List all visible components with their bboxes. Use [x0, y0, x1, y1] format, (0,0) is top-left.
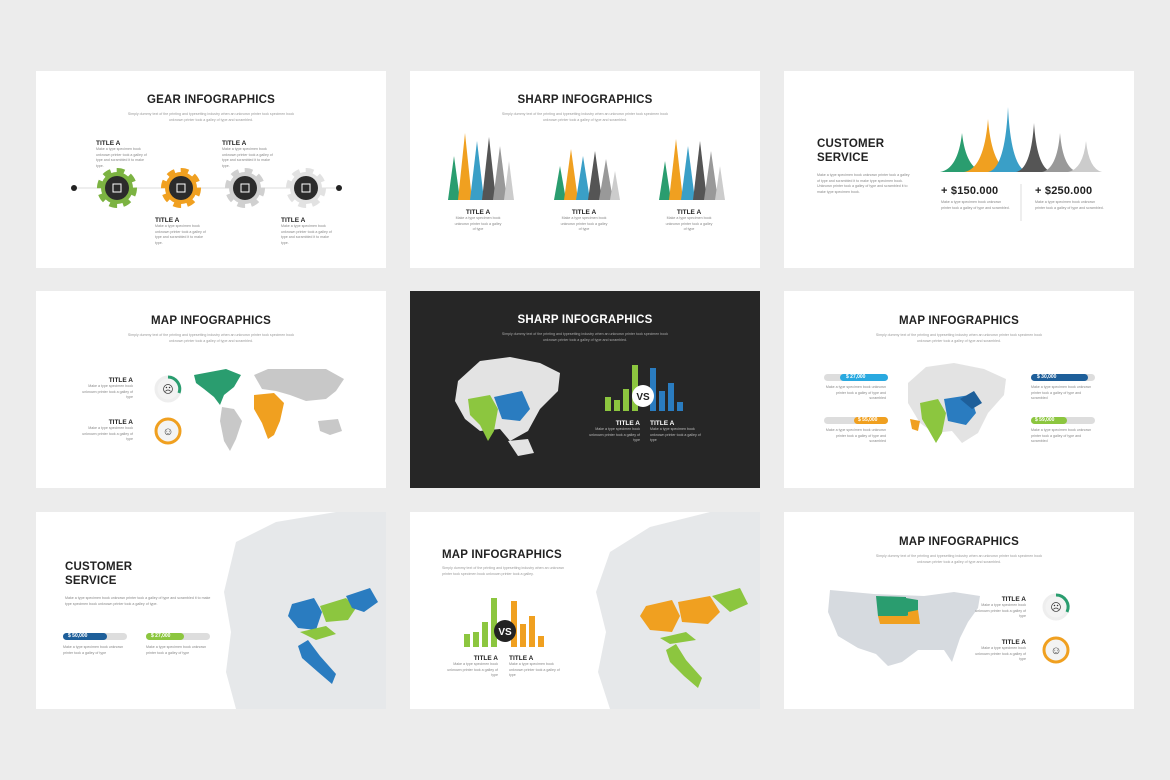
slide: map infographics asia pills: Make a type specimen book unknown printer took a galley of type and scrambled: [826, 428, 886, 443]
text: title A 4: TITLE A: [281, 217, 305, 224]
europe map: [224, 512, 386, 709]
bar chart vs: [464, 598, 544, 647]
pill: $27,000: $ 27,000: [151, 633, 170, 639]
text: title A right: [666, 209, 712, 231]
slide: map infographics usa: [784, 512, 1134, 709]
title: GEAR INFOGRAPHICS: [147, 94, 275, 106]
pill: $30,000: $ 30,000: [1037, 374, 1056, 380]
text: title A right: [650, 420, 701, 442]
heading: CUSTOMER: [65, 561, 132, 573]
text: title A 2: Make a type specimen book unknown printer took a galley of type: [975, 646, 1026, 661]
subtitle: Simply dummy text of the printing and typesetting industry when an unknown printer took specimen book unknown printer took a galley of type and scrambled.: [128, 112, 294, 122]
usa map and icons: [828, 590, 1070, 666]
europe map: [596, 512, 760, 709]
text: title A 1: [975, 596, 1026, 618]
text: title A 1: Make a type specimen book unknown printer took a galley of type and scrambled it to make type.: [96, 147, 147, 168]
title: MAP INFOGRAPHICS: [151, 315, 271, 327]
slide: map infographics asia pills: Make a type specimen book unknown printer took a galley of type and scrambled: [1031, 385, 1091, 400]
text: title A left: TITLE A: [474, 655, 498, 662]
heading: SERVICE: [817, 152, 869, 164]
slide: customer service europe: Make a type specimen book unknown printer took a galley of type: [63, 645, 123, 654]
text: title A right: Make a type specimen book unknown printer took a galley of type: [666, 216, 712, 231]
title: MAP INFOGRAPHICS: [899, 536, 1019, 548]
pill: $30,000: [1031, 374, 1095, 381]
title: SHARP INFOGRAPHICS: [517, 314, 652, 326]
stat 1: Make a type specimen book unknown printer took a galley of type and scrambled.: [941, 200, 1010, 210]
heading: [65, 561, 132, 587]
text: title A left: TITLE A: [466, 209, 490, 216]
text: title A right: Make a type specimen book unknown printer took a galley of type: [509, 662, 560, 677]
text: title A 2: Make a type specimen book unknown printer took a galley of type and scrambled it to make type.: [155, 224, 206, 244]
text: title A left: TITLE A: [616, 420, 640, 427]
pill: $27,000: [146, 633, 210, 640]
text: title A 1: Make a type specimen book unknown printer took a galley of type: [82, 384, 133, 399]
text: title A 3: Make a type specimen book unknown printer took a galley of type and scrambled it to make type.: [222, 147, 273, 168]
title: MAP INFOGRAPHICS: [899, 315, 1019, 327]
pill: $55,000: $ 55,000: [858, 417, 877, 423]
text: title A 3: TITLE A: [222, 140, 246, 147]
slide: map infographics asia pills: Make a type specimen book unknown printer took a galley of type and scrambled: [1031, 428, 1091, 443]
heading: SERVICE: [65, 575, 117, 587]
text: title A left: [589, 420, 640, 442]
pill: $50,000: $ 50,000: [68, 633, 87, 639]
slide: gear infographics: [36, 71, 386, 268]
text: title A left: [447, 655, 498, 677]
pill texts: Make a type specimen book unknown printer took a galley of type and scrambled: [826, 385, 886, 400]
usa map and icons: ☹: [1050, 602, 1062, 614]
text: title A 2: [82, 419, 133, 441]
pill: $50,000: [63, 633, 127, 640]
slide: sharp infographics dark: [410, 291, 760, 488]
subtitle: Simply dummy text of the printing and typesetting industry when an unknown printer took specimen book unknown printer took a galley of type and scrambled.: [876, 333, 1042, 343]
slide: map infographics asia pills: [784, 291, 1134, 488]
text: title A left: [454, 209, 502, 231]
bar chart vs: VS: [498, 627, 512, 638]
subtitle: Simply dummy text of the printing and typesetting industry when an unknown printer took specimen book unknown printer took a galley.: [442, 566, 564, 576]
pill: $59,000: [1031, 417, 1095, 424]
slide: customer service europe: Make a type specimen book unknown printer took a galley of type: [146, 645, 206, 654]
stat 2: + $250.000: [1035, 185, 1092, 197]
pill: $59,000: $ 59,000: [1035, 417, 1054, 423]
text: title A 1: TITLE A: [1002, 596, 1026, 603]
text: title A right: TITLE A: [650, 420, 674, 427]
text: title A middle: TITLE A: [572, 209, 596, 216]
subtitle: Simply dummy text of the printing and typesetting industry when an unknown printer took specimen book unknown printer took a galley of type and scrambled.: [128, 333, 294, 343]
slide: customer service europe: [36, 512, 386, 709]
text: title A 2: [975, 639, 1026, 661]
stat 2: Make a type specimen book unknown printer took a galley of type and scrambled.: [1035, 200, 1104, 210]
text: title A right: [509, 655, 560, 677]
text: title A 1: TITLE A: [109, 377, 133, 384]
asia map: [908, 363, 1006, 443]
text: title A 2: TITLE A: [155, 217, 179, 224]
icons and world map: ☺: [162, 426, 174, 438]
pill: $55,000: [824, 417, 888, 424]
pill: $27,000: $ 27,000: [846, 374, 865, 380]
text: title A 1: [82, 377, 133, 399]
slide: map infographics world: [36, 291, 386, 488]
paragraph: Make a type specimen book unknown printer took a galley of type and scrambled it to make type specimen book. Unknown printer took a galley of type and scrambled it to make type specimen book.: [817, 173, 910, 194]
slide: customer service spikes: [784, 71, 1134, 268]
text: title A right: TITLE A: [677, 209, 701, 216]
spike chart: [940, 108, 1102, 221]
text: title A middle: Make a type specimen book unknown printer took a galley of type: [561, 216, 607, 231]
text: title A right: Make a type specimen book unknown printer took a galley of type: [650, 427, 701, 442]
pill: $27,000: [824, 374, 888, 381]
subtitle: Simply dummy text of the printing and typesetting industry when an unknown printer took specimen book unknown printer took a galley of type and scrambled.: [502, 332, 668, 342]
stat 1: + $150.000: [941, 185, 998, 197]
heading: [817, 138, 884, 164]
text: title A middle: [560, 209, 608, 231]
text: title A 4: Make a type specimen book unknown printer took a galley of type and scrambled it to make type.: [281, 224, 332, 244]
slide: map infographics europe vs: [410, 512, 760, 709]
icons and world map: ☹: [162, 384, 174, 396]
spike charts: [448, 133, 725, 200]
gear timeline: [71, 168, 342, 208]
stat 2: [1035, 185, 1104, 210]
slide: sharp infographics light: [410, 71, 760, 268]
text: title A 2: TITLE A: [109, 419, 133, 426]
paragraph: Make a type specimen book unknown printer took a galley of type and scrambled it to make type specimen book unknown printer took a galley of type.: [65, 596, 210, 606]
text: title A left: Make a type specimen book unknown printer took a galley of type: [589, 427, 640, 442]
text: title A 2: TITLE A: [1002, 639, 1026, 646]
icons and world map: [154, 369, 344, 451]
subtitle: Simply dummy text of the printing and typesetting industry when an unknown printer took specimen book unknown printer took a galley of type and scrambled.: [502, 112, 668, 122]
heading: CUSTOMER: [817, 138, 884, 150]
text: title A right: TITLE A: [509, 655, 533, 662]
usa map and icons: ☺: [1050, 645, 1062, 657]
text: title A 1: Make a type specimen book unknown printer took a galley of type: [975, 603, 1026, 618]
text: title A 2: Make a type specimen book unknown printer took a galley of type: [82, 426, 133, 441]
asia map and bar chart: [455, 357, 683, 456]
title: SHARP INFOGRAPHICS: [517, 94, 652, 106]
subtitle: Simply dummy text of the printing and typesetting industry when an unknown printer took specimen book unknown printer took a galley of type and scrambled.: [876, 554, 1042, 564]
title: MAP INFOGRAPHICS: [442, 549, 562, 561]
text: title A left: Make a type specimen book unknown printer took a galley of type: [447, 662, 498, 677]
asia map and bar chart: VS: [636, 392, 650, 403]
stat 1: [941, 185, 1010, 210]
text: title A 1: TITLE A: [96, 140, 120, 147]
text: title A left: Make a type specimen book unknown printer took a galley of type: [455, 216, 501, 231]
